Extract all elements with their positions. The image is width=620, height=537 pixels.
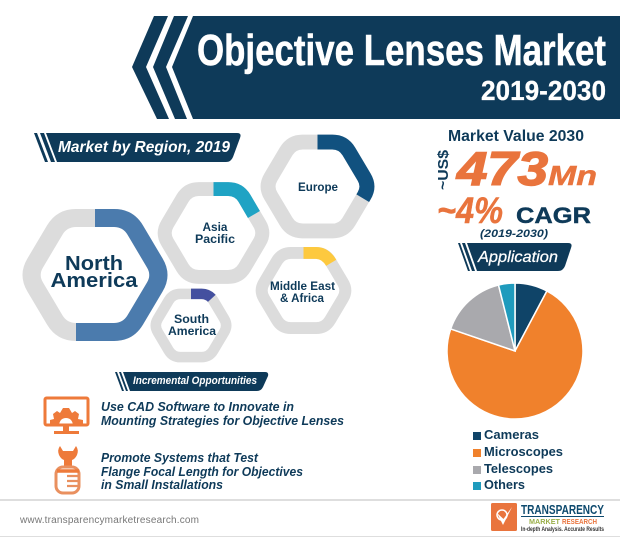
hexagon: North America: North	[65, 253, 123, 275]
market value number: Mn	[548, 160, 597, 191]
CAGR value: ~4%	[437, 190, 503, 231]
CAGR value	[437, 190, 591, 240]
market value number	[456, 142, 597, 195]
text: flange focal length opportunity: Promote Systems that Test	[101, 450, 259, 465]
legend: Microscopes	[484, 444, 563, 459]
heading: application: Application	[477, 249, 558, 266]
years subtitle: 2019-2030	[481, 75, 606, 106]
text: CAD opportunity	[101, 399, 344, 428]
logo: Transparency Market Research	[491, 502, 605, 533]
hexagon: Europe: Europe	[298, 182, 338, 194]
icon: hand holding wrench	[56, 446, 79, 493]
hexagon: North America	[32, 218, 158, 332]
hexagon: Asia Pacific	[165, 189, 262, 277]
footer website: www.transparencymarketresearch.com	[19, 515, 199, 526]
logo: Transparency Market Research: MARKET	[529, 517, 560, 526]
hexagon: Middle East and Africa	[262, 253, 345, 328]
text: flange focal length opportunity: Flange Focal Length for Objectives	[101, 464, 303, 479]
pie chart: application share	[447, 283, 583, 419]
legend: Cameras	[484, 427, 539, 442]
market value heading: Market Value 2030	[448, 128, 584, 145]
logo: Transparency Market Research: RESEARCH	[562, 517, 597, 526]
icon: CAD monitor with gear	[45, 398, 88, 434]
hexagon: Asia Pacific: Pacific	[195, 234, 236, 246]
hexagon: Middle East and Africa: & Africa	[280, 293, 325, 305]
hexagon: North America: America	[50, 270, 138, 292]
heading: incremental opportunities: Incremental Opportunities	[133, 375, 257, 387]
currency label: ~US$	[435, 149, 452, 190]
legend: Others	[484, 477, 525, 492]
legend: Telescopes	[484, 461, 553, 476]
CAGR value: CAGR	[516, 203, 591, 228]
hexagon: South America	[156, 294, 226, 357]
hexagon: Middle East and Africa: Middle East	[270, 281, 335, 293]
hexagon: South America: America	[168, 326, 217, 338]
title banner	[132, 16, 620, 119]
heading: application	[458, 243, 572, 271]
hexagon: South America: South	[174, 314, 209, 326]
logo: Transparency Market Research: In-depth Analysis. Accurate Results	[521, 527, 605, 533]
heading: market by region: Market by Region, 2019	[58, 139, 230, 156]
text: flange focal length opportunity: in Small Installations	[101, 477, 223, 492]
text: CAD opportunity: Mounting Strategies for Objective Lenses	[101, 413, 344, 428]
hexagon: Asia Pacific: Asia	[202, 222, 228, 234]
legend	[473, 427, 563, 492]
heading: incremental opportunities	[115, 372, 268, 391]
CAGR value: (2019-2030)	[480, 228, 548, 240]
market value number: 473	[456, 142, 548, 195]
text: CAD opportunity: Use CAD Software to Innovate in	[101, 399, 294, 414]
hexagon: Europe	[268, 142, 367, 231]
text: flange focal length opportunity	[101, 450, 303, 492]
heading: market by region	[34, 133, 241, 162]
